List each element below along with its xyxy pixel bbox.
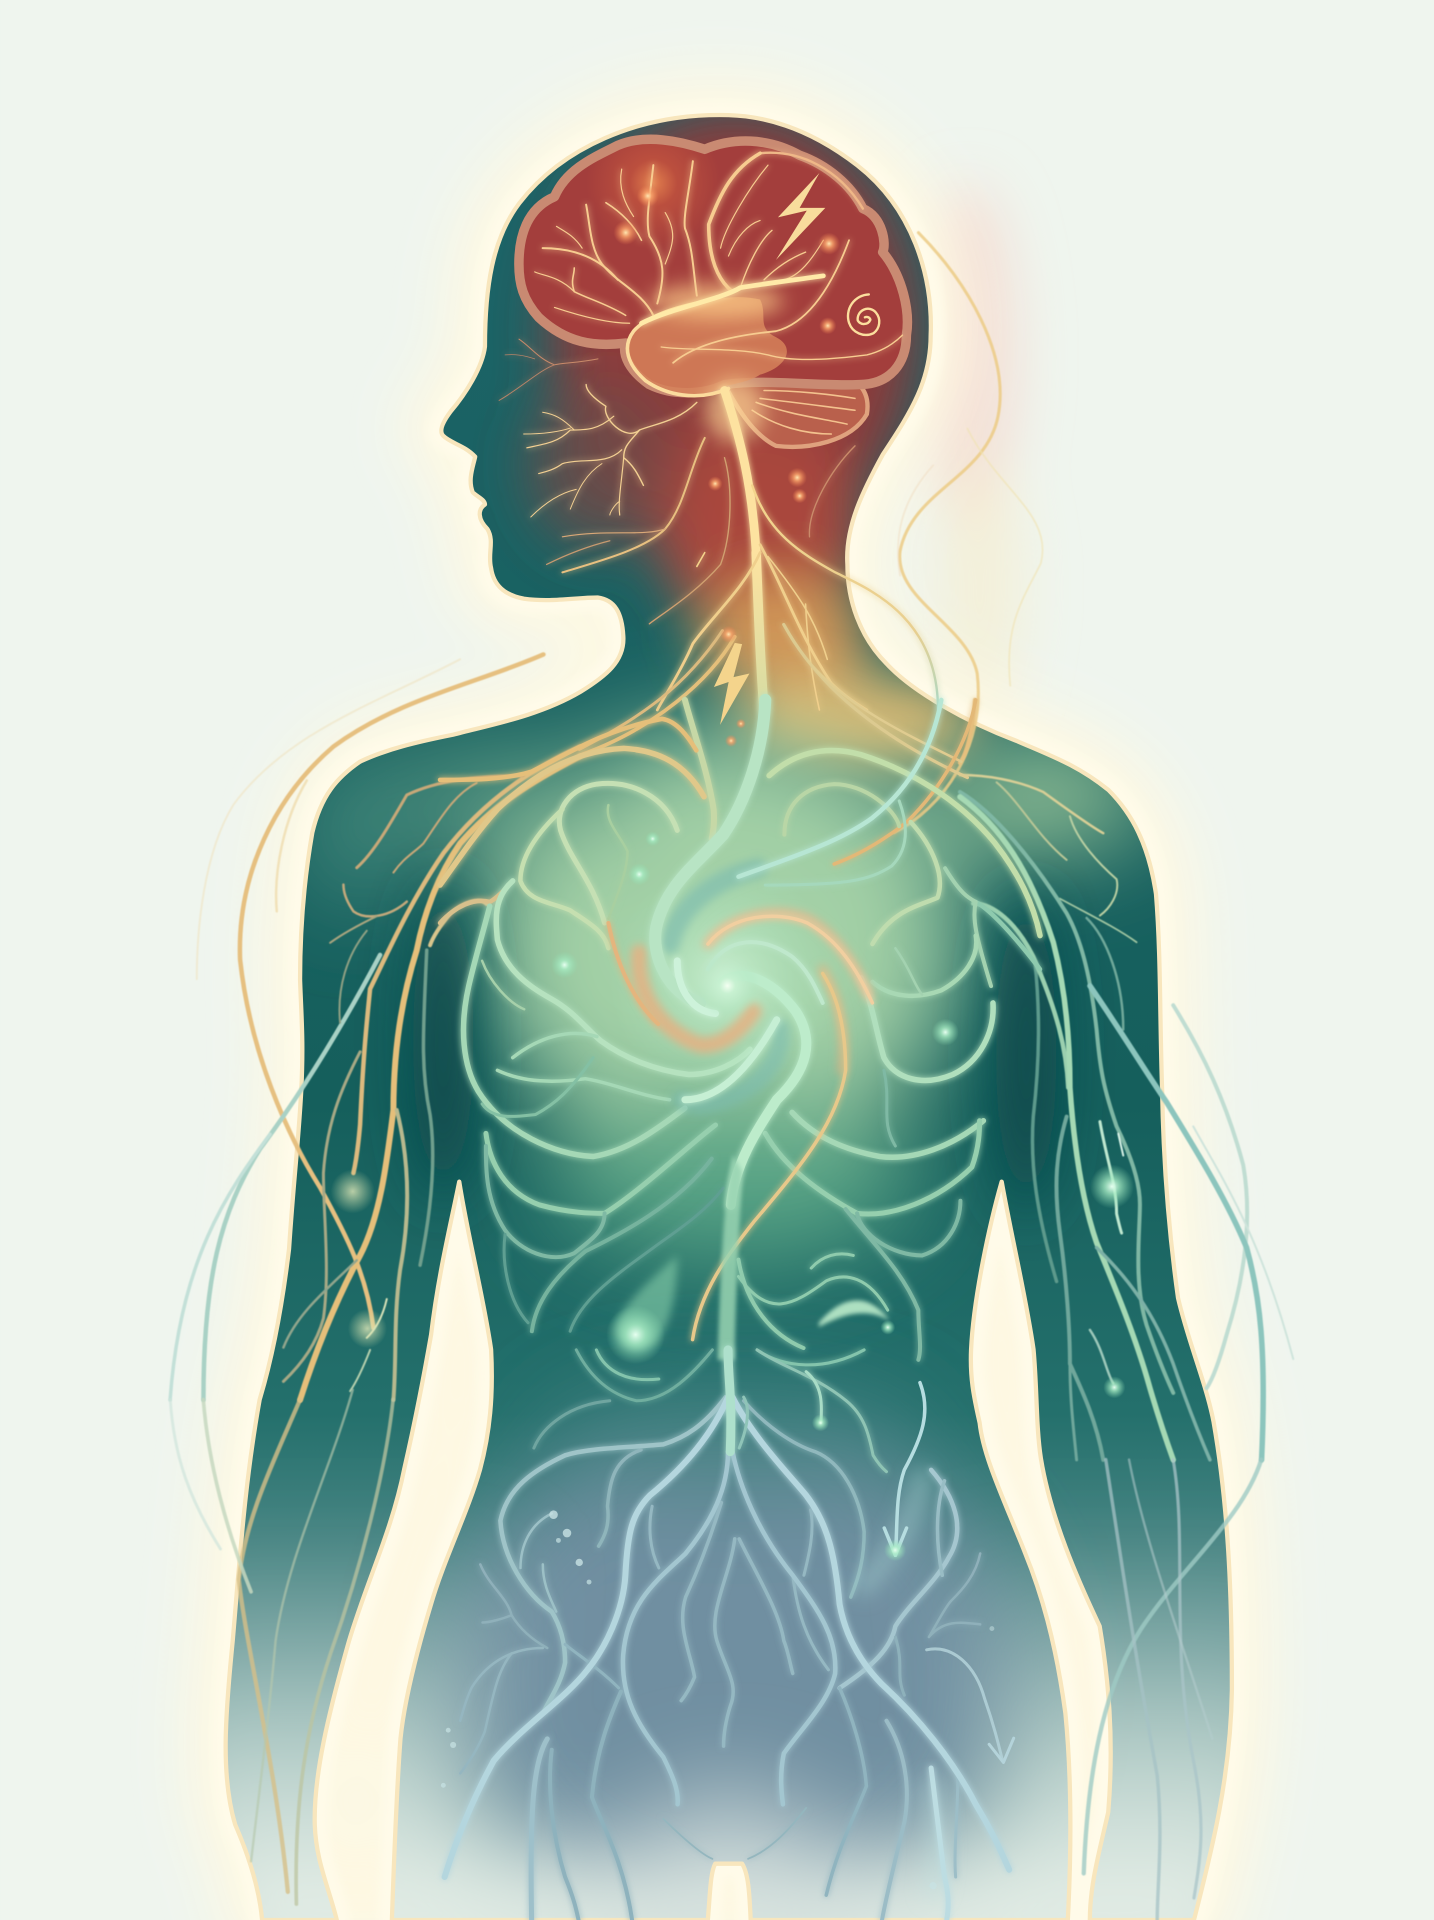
- nerves: lower left arm: [170, 1390, 393, 1904]
- armpit shadow: [413, 882, 1057, 1212]
- particle haze near abdomen: [864, 1477, 937, 1892]
- outer wisps: head strands: [894, 233, 1043, 833]
- body outline: [226, 115, 1232, 1920]
- human body silhouette: [228, 117, 1230, 1918]
- nerves: left arm and shoulder: [170, 654, 580, 1400]
- bottom edge fade: [228, 1538, 1230, 1918]
- nerves: lower right arm: [1084, 1460, 1261, 1920]
- neck and central trunk nerves: [547, 390, 938, 710]
- nerves: right arm and shoulder: [960, 700, 1293, 1460]
- glow: cream halo around body: [226, 115, 1232, 1920]
- arrow: lower hip flow: [927, 1649, 1014, 1763]
- cerebellum folds: [752, 390, 855, 434]
- brain nerve branches: [535, 153, 902, 363]
- brain: [519, 139, 907, 447]
- icon: neck lightning bolt: [714, 643, 749, 725]
- cerebrum: [519, 139, 907, 393]
- glow: brain core: [649, 284, 784, 442]
- icon: brain lightning bolt: [776, 173, 825, 260]
- glowing dots: [331, 185, 1134, 1889]
- head colour wash: [527, 110, 980, 771]
- face nerve branches: [499, 339, 697, 517]
- nerves: neck to shoulder links: [579, 624, 967, 778]
- spiral core: [696, 954, 759, 1018]
- cerebellum: [725, 385, 868, 447]
- icon: brain spiral: [848, 294, 879, 335]
- icon: teardrop glow: [606, 1255, 677, 1364]
- chest colour wash: [312, 729, 1151, 1261]
- abdominal central trunk: [717, 1154, 742, 1360]
- lower torso colour wash: [445, 1396, 1020, 1920]
- central spiral vortex: [608, 700, 941, 1360]
- icon: right abdominal swirl: [819, 1300, 890, 1327]
- arrow: upper abdominal flow: [884, 1383, 925, 1555]
- spiral shading: [639, 868, 869, 1105]
- spiral soft glow: [609, 863, 841, 1096]
- chest nerve tree: [440, 700, 1040, 1360]
- temporal lobe: [627, 297, 787, 395]
- spiral arms: [608, 700, 941, 1340]
- glow: pink haze behind head: [918, 184, 1023, 722]
- lower torso nerve tree: [445, 1350, 1009, 1920]
